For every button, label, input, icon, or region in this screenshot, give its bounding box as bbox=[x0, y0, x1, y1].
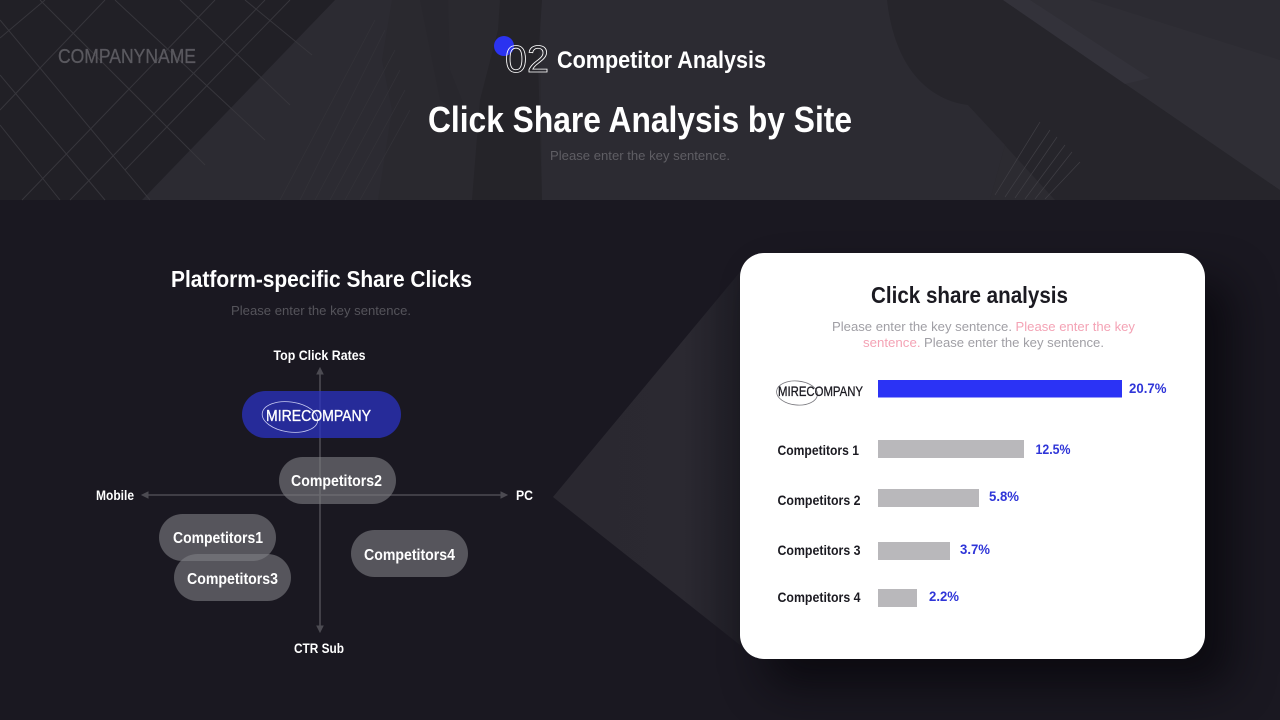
card description: sentence. bbox=[863, 335, 920, 350]
row: Competitors 4 bbox=[778, 588, 960, 607]
row: Competitors 3: Competitors 3 bbox=[778, 543, 861, 558]
card description bbox=[832, 319, 1135, 350]
row: MIRECOMPANY bbox=[776, 379, 1167, 407]
section title: Competitor Analysis bbox=[557, 47, 766, 74]
bubble: MIRECOMPANY bbox=[242, 391, 401, 438]
bubble: Competitors3 bbox=[174, 554, 291, 601]
bubble: MIRECOMPANY: MIRECOMPANY bbox=[266, 408, 371, 425]
left heading: Platform-specific Share Clicks bbox=[171, 266, 472, 292]
bubble: Competitors1: Competitors1 bbox=[173, 530, 263, 547]
bubble: Competitors1 bbox=[159, 514, 276, 561]
axis label: left: Mobile bbox=[96, 488, 134, 503]
card description: Please enter the key bbox=[1016, 319, 1135, 334]
card shadow bbox=[740, 253, 1205, 659]
main title: Click Share Analysis by Site bbox=[428, 99, 852, 140]
card description: Please enter the key sentence. bbox=[832, 319, 1012, 334]
row: Competitors 2 bbox=[778, 488, 1020, 508]
bubble: Competitors4 bbox=[351, 530, 468, 577]
axis label: bottom: CTR Sub bbox=[294, 641, 344, 656]
row: Competitors 1: 12.5% bbox=[1036, 441, 1071, 457]
row: Competitors 3: 3.7% bbox=[960, 541, 991, 557]
axis label: right: PC bbox=[516, 488, 533, 503]
row: Competitors 2: 5.8% bbox=[989, 488, 1020, 504]
bubble: Competitors2: Competitors2 bbox=[291, 473, 382, 490]
section number with blue dot: 02 bbox=[505, 39, 549, 81]
row: MIRECOMPANY: MIRECOMPANY bbox=[778, 384, 863, 399]
row: Competitors 1 bbox=[778, 440, 1071, 458]
bar chart bbox=[776, 379, 1167, 607]
building, right bbox=[887, 0, 1280, 200]
tower, center bbox=[280, 0, 542, 200]
bubble: Competitors3: Competitors3 bbox=[187, 571, 278, 588]
panel: click share analysis card bbox=[740, 253, 1205, 659]
card title: Click share analysis bbox=[871, 282, 1068, 308]
left subheading: Please enter the key sentence. bbox=[231, 304, 411, 318]
row: Competitors 4: Competitors 4 bbox=[778, 590, 861, 605]
background triangle bbox=[553, 272, 740, 645]
card description: Please enter the key sentence. bbox=[924, 335, 1104, 350]
bubble: Competitors2 bbox=[279, 457, 396, 504]
header photo band bbox=[0, 0, 1280, 200]
row: Competitors 2: Competitors 2 bbox=[778, 493, 860, 508]
row: Competitors 3 bbox=[778, 541, 991, 560]
row: MIRECOMPANY: 20.7% bbox=[1129, 380, 1167, 396]
key sentence: Please enter the key sentence. bbox=[550, 149, 730, 163]
axis label: top: Top Click Rates bbox=[274, 348, 366, 363]
positioning map bbox=[96, 348, 533, 656]
company name: COMPANYNAME bbox=[58, 46, 196, 68]
horizontal axis arrow bbox=[142, 492, 507, 498]
row: Competitors 1: Competitors 1 bbox=[778, 443, 859, 458]
dark building grid, left bbox=[0, 0, 335, 200]
row: Competitors 4: 2.2% bbox=[929, 588, 960, 604]
vertical axis arrow bbox=[317, 368, 323, 632]
bubble: Competitors4: Competitors4 bbox=[364, 547, 455, 564]
